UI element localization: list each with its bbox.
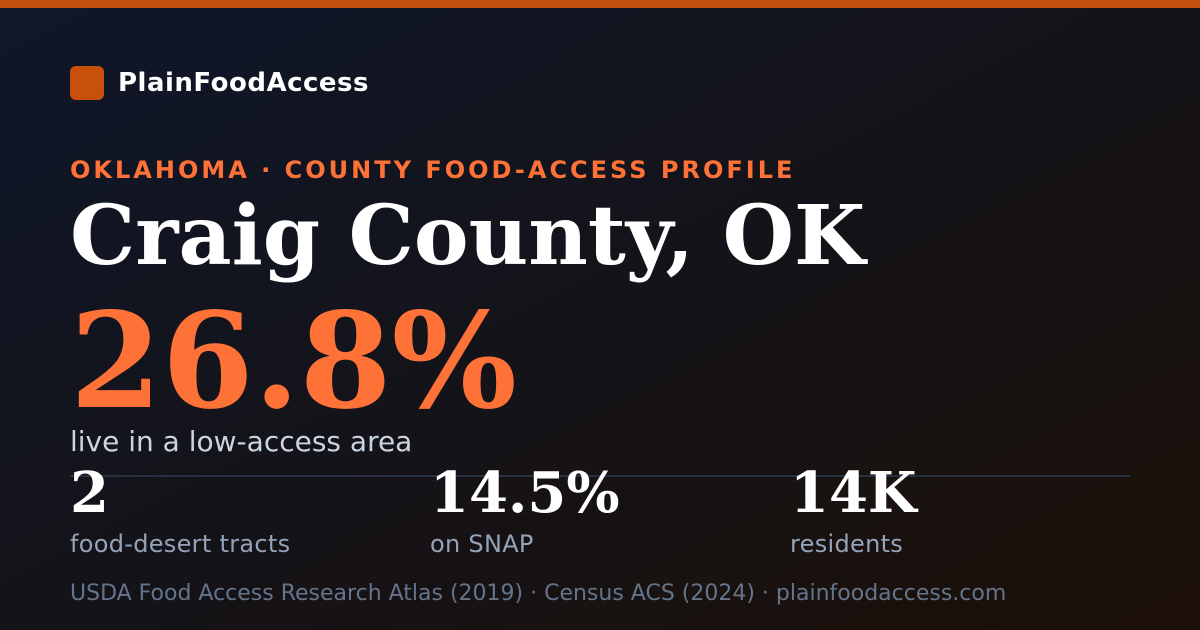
stat: on SNAP <box>430 460 620 558</box>
divider <box>70 475 1130 477</box>
stat value: 2 <box>70 460 109 526</box>
main statistic: 26.8% <box>70 284 517 439</box>
stat value: 14.5% <box>430 460 620 526</box>
stat label: residents <box>790 530 903 558</box>
top accent bar <box>0 0 1200 8</box>
stat: food-desert tracts <box>70 460 290 558</box>
brand logo mark <box>70 66 104 100</box>
county title: Craig County, OK <box>70 188 865 284</box>
stat label: on SNAP <box>430 530 534 558</box>
stat value: 14K <box>790 460 917 526</box>
eyebrow: OKLAHOMA · COUNTY FOOD-ACCESS PROFILE <box>70 156 795 184</box>
brand name: PlainFoodAccess <box>118 68 369 98</box>
stat: residents <box>790 460 918 558</box>
stat label: food-desert tracts <box>70 530 290 558</box>
source footer: USDA Food Access Research Atlas (2019) · Census ACS (2024) · plainfoodaccess.com <box>70 581 1006 606</box>
main statistic label: live in a low-access area <box>70 425 412 458</box>
